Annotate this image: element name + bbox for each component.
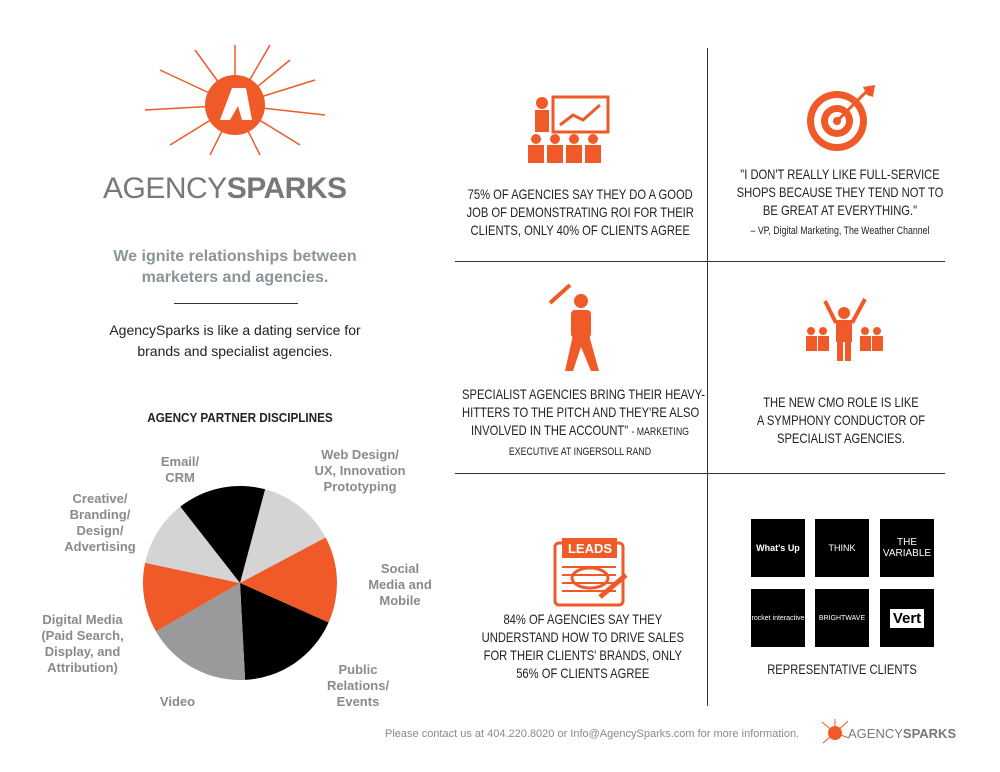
client logos: THE VARIABLE xyxy=(883,537,931,559)
client logos xyxy=(751,519,934,647)
pie labels: Email/ xyxy=(161,454,199,469)
text: Design/ xyxy=(77,523,123,538)
pie labels: CRM xyxy=(165,470,195,485)
quote: heavy-hitters: INVOLVED IN THE ACCOUNT" - MARKETING xyxy=(471,422,689,438)
icon: leads: LEADS xyxy=(568,541,612,556)
text: Media and xyxy=(368,577,432,592)
stat: ROI: JOB OF DEMONSTRATING ROI FOR THEIR xyxy=(467,204,694,220)
quote: heavy-hitters: HITTERS TO THE PITCH AND THEY'RE ALSO xyxy=(462,404,699,420)
text: Video xyxy=(160,694,195,709)
text: Web Design/ xyxy=(321,447,399,462)
text: Prototyping xyxy=(324,479,396,494)
icon: baseball player xyxy=(548,284,599,371)
logo xyxy=(145,44,326,156)
stat: CMO: A SYMPHONY CONDUCTOR OF xyxy=(757,412,925,428)
text: Mobile xyxy=(379,593,421,608)
quote: heavy-hitters xyxy=(462,386,705,458)
text: Social xyxy=(381,561,419,576)
text: Branding/ xyxy=(70,507,130,522)
clients label: REPRESENTATIVE CLIENTS xyxy=(767,661,917,677)
text: Digital Media xyxy=(42,612,123,627)
stat: CMO: SPECIALIST AGENCIES. xyxy=(777,430,905,446)
icon: leads xyxy=(554,538,628,606)
stat: ROI xyxy=(466,186,694,238)
text: (Paid Search, xyxy=(41,628,124,643)
quote: heavy-hitters: EXECUTIVE AT INGERSOLL RAND xyxy=(509,446,651,458)
stat: sales: 56% OF CLIENTS AGREE xyxy=(516,665,649,681)
stat: sales: FOR THEIR CLIENTS' BRANDS, ONLY xyxy=(484,647,682,663)
quote: full-service: "I DON'T REALLY LIKE FULL-SERVICE xyxy=(740,166,940,182)
icon: presentation xyxy=(528,96,610,163)
text: Events xyxy=(337,694,379,709)
icon: target xyxy=(807,85,875,151)
stat: sales xyxy=(482,611,684,681)
pie title: AGENCY PARTNER DISCIPLINES xyxy=(147,410,333,425)
stat: CMO xyxy=(756,394,925,446)
client logos: rocket interactive xyxy=(752,614,804,622)
client logos: BRIGHTWAVE xyxy=(819,614,865,622)
quote: full-service: – VP, Digital Marketing, The Weather Channel xyxy=(750,225,930,237)
quote: full-service xyxy=(737,166,943,237)
text: UX, Innovation xyxy=(314,463,406,478)
footer contact: Please contact us at 404.220.8020 or Info@AgencySparks.com for more information. xyxy=(385,728,799,740)
pie labels xyxy=(161,454,199,485)
footer logo xyxy=(822,719,956,744)
client logos: THINK xyxy=(828,543,856,553)
dividers xyxy=(707,48,708,706)
description: AgencySparks is like a dating service for brands and specialist agencies. xyxy=(109,322,361,359)
pie chart xyxy=(142,486,337,680)
stat: CMO: THE NEW CMO ROLE IS LIKE xyxy=(763,394,919,410)
stat: ROI: 75% OF AGENCIES SAY THEY DO A GOOD xyxy=(468,186,693,202)
text: Relations/ xyxy=(327,678,389,693)
quote: full-service: BE GREAT AT EVERYTHING." xyxy=(763,202,917,218)
stat: ROI: CLIENTS, ONLY 40% OF CLIENTS AGREE xyxy=(471,222,690,238)
stat: sales: UNDERSTAND HOW TO DRIVE SALES xyxy=(482,629,684,645)
text: Public xyxy=(338,662,378,677)
footer logo: AGENCYSPARKS xyxy=(848,726,956,741)
text: Attribution) xyxy=(47,660,118,675)
stat: sales: 84% OF AGENCIES SAY THEY xyxy=(503,611,662,627)
tagline: We ignite relationships between marketers and agencies. xyxy=(113,248,357,286)
quote: full-service: SHOPS BECAUSE THEY TEND NOT TO xyxy=(737,184,943,200)
brand name: AGENCYSPARKS xyxy=(103,172,347,205)
text: Advertising xyxy=(64,539,136,554)
text: Creative/ xyxy=(73,491,127,506)
icon: conductor xyxy=(806,298,883,361)
text: Display, and xyxy=(45,644,120,659)
quote: heavy-hitters: SPECIALIST AGENCIES BRING THEIR HEAVY- xyxy=(462,386,705,402)
client logos: What's Up xyxy=(756,543,800,553)
client logos: Vert xyxy=(893,610,921,626)
